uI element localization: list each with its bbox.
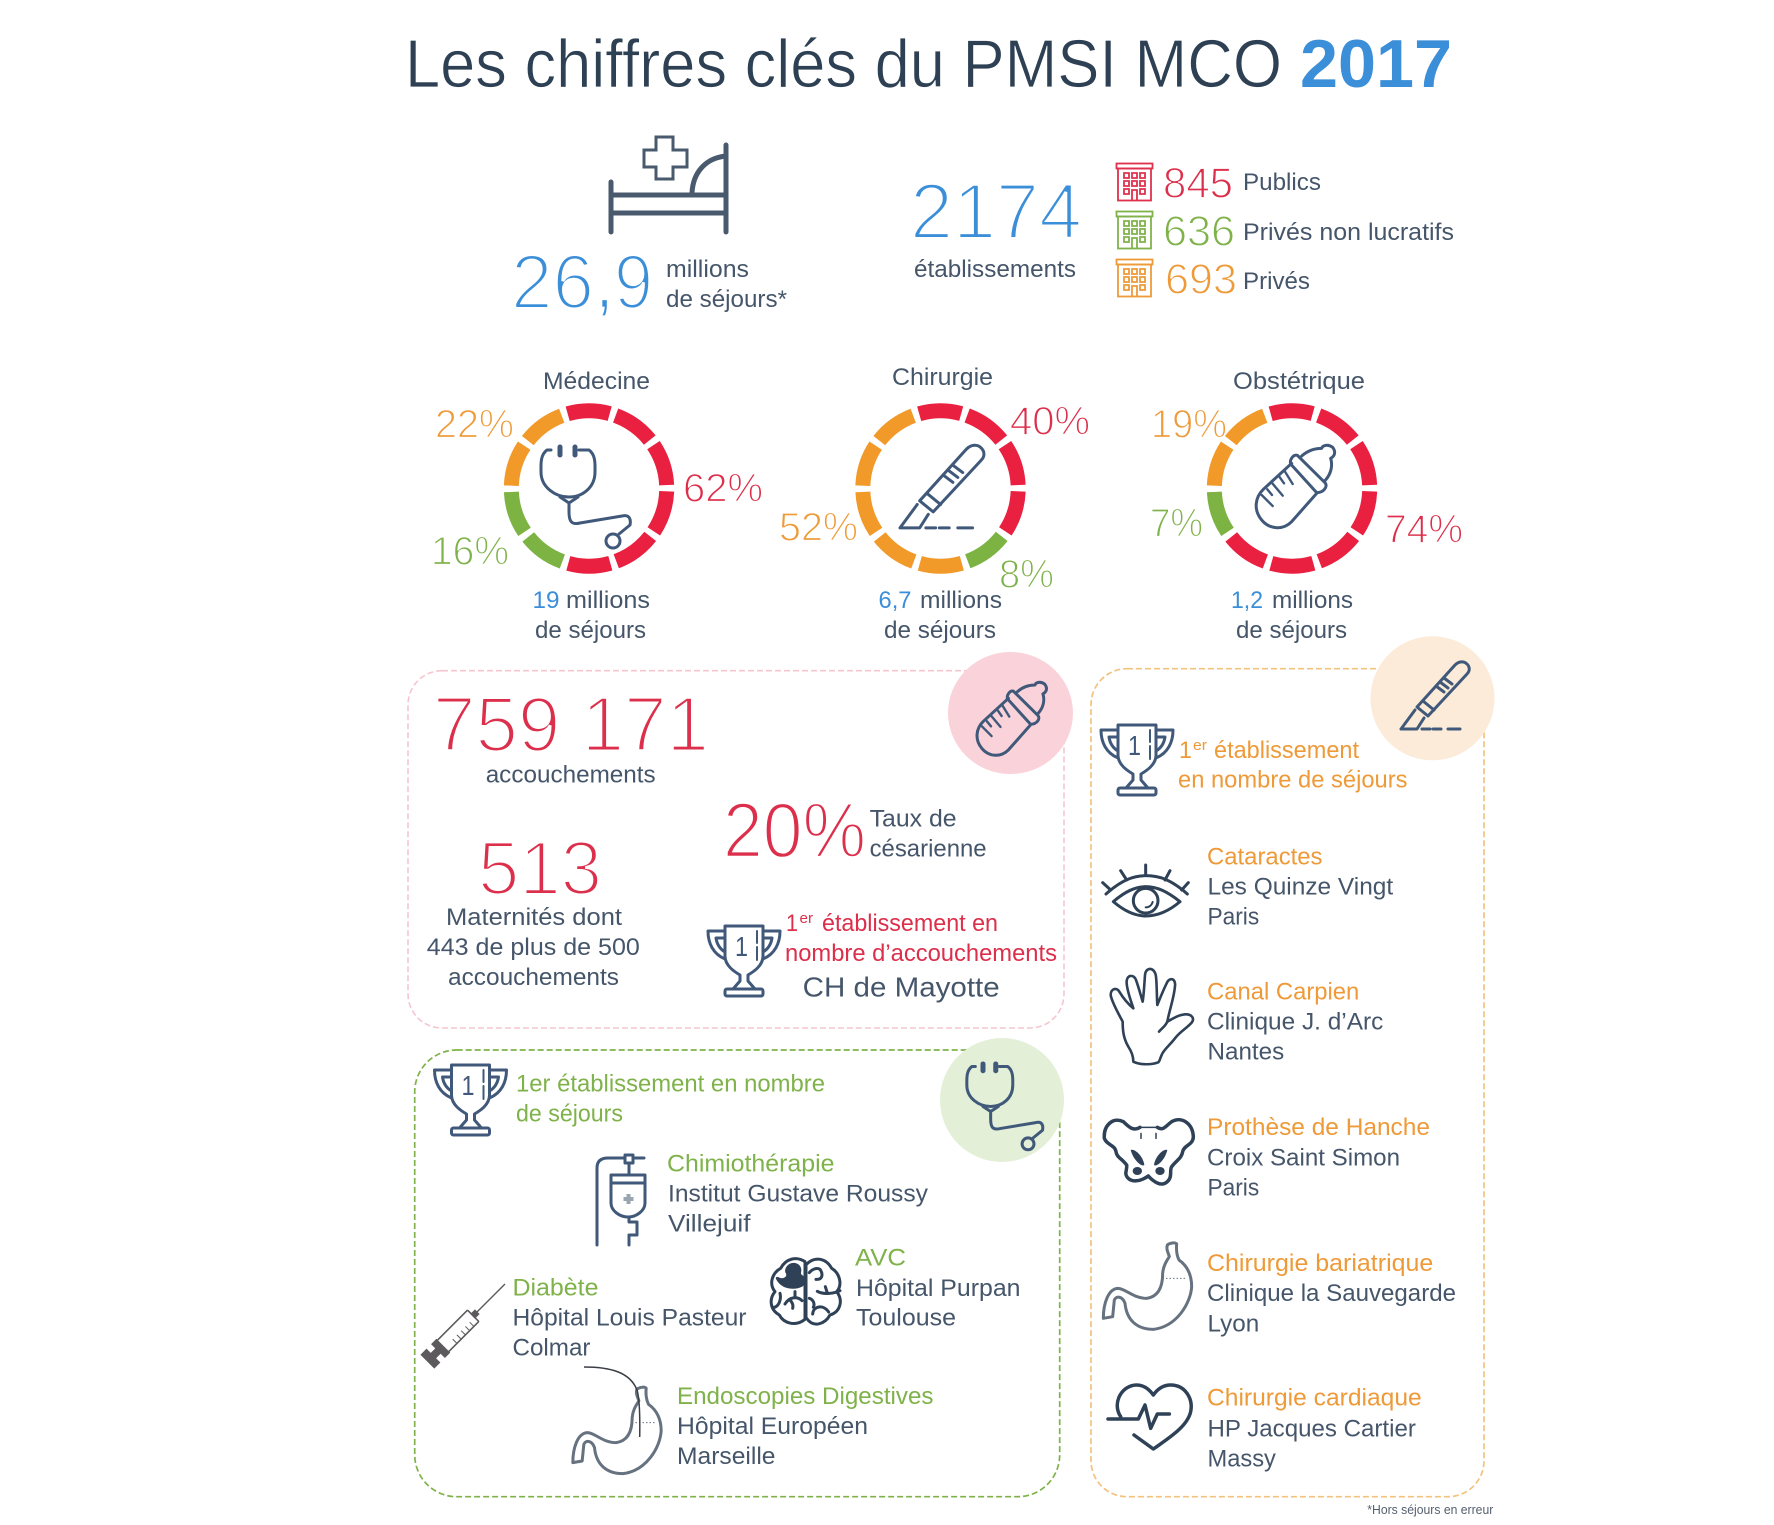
stat: 513 maternités <box>427 826 640 991</box>
icon: trophy <box>708 926 780 996</box>
label: 8%: 8% <box>999 553 1054 597</box>
icon: stomach with endoscope <box>573 1367 661 1474</box>
icon: trophy <box>434 1065 506 1135</box>
icon: syringe <box>422 1278 511 1367</box>
stat: privés non lucratifs: Privés non lucratifs <box>1243 219 1454 246</box>
stat: 26,9 millions de séjours: millions <box>666 256 749 283</box>
label: 19%: 19% <box>1151 403 1227 447</box>
entry: Chimiothérapie: Chimiothérapie <box>667 1151 834 1178</box>
text: 1,2 millions de séjours: 1,2 <box>1231 587 1263 614</box>
stat: publics: Publics <box>1243 169 1321 196</box>
entry: Cataractes: Cataractes <box>1207 843 1322 870</box>
icon: brain <box>771 1259 840 1324</box>
badge: stethoscope circle <box>940 1038 1064 1162</box>
icon: hospital bed <box>611 137 726 232</box>
stat: 26,9 millions de séjours: de séjours* <box>666 286 787 313</box>
entry: Chirurgie bariatrique: Chirurgie bariatrique <box>1207 1250 1433 1277</box>
panel: obstétrique <box>408 652 1073 1028</box>
text: 1,2 millions de séjours: de séjours <box>1236 617 1347 644</box>
stat: publics: 845 <box>1163 161 1233 208</box>
entry: Chirurgie cardiaque <box>1207 1385 1422 1473</box>
label: 22%: 22% <box>435 403 514 447</box>
entry: Endoscopies Digestives: Marseille <box>677 1443 776 1470</box>
entry: Canal Carpien: Nantes <box>1208 1038 1284 1065</box>
entry: Diabète <box>512 1275 746 1362</box>
text: 19 millions de séjours: de séjours <box>535 617 646 644</box>
stat: 513 maternités: 513 <box>478 826 602 912</box>
entry: Prothèse de Hanche: Prothèse de Hanche <box>1207 1114 1430 1141</box>
entry: Cataractes: Paris <box>1208 903 1259 930</box>
text: 6,7 millions de séjours: millions <box>920 587 1002 614</box>
title: 2017 <box>1300 26 1452 102</box>
text: 1er établissement en nombre de séjours: 1 <box>1179 737 1192 764</box>
title: Les chiffres clés du PMSI MCO <box>405 26 1282 102</box>
badge: scalpel circle <box>1370 636 1494 760</box>
stat: privés: 693 <box>1165 257 1237 304</box>
heading: Médecine: Médecine <box>543 368 650 395</box>
icon: green building <box>1116 212 1152 248</box>
text: 1er établissement, CH de Mayotte: 1 <box>786 910 798 937</box>
icon: eye <box>1103 865 1188 916</box>
stat: 513 maternités: accouchements <box>448 964 619 991</box>
icon: heart with pulse <box>1108 1385 1191 1449</box>
text: 1er établissement en nombre de séjours: en nombre de séjours <box>1178 767 1408 794</box>
stat: privés <box>1116 257 1310 304</box>
entry: Prothèse de Hanche <box>1207 1114 1430 1202</box>
icon: IV drip <box>597 1155 645 1245</box>
text: 1er établissement en nombre de séjours: de séjours <box>516 1101 623 1128</box>
entry: Canal Carpien <box>1207 978 1383 1065</box>
entry: Prothèse de Hanche: Paris <box>1208 1175 1259 1202</box>
stat: 513 maternités: 443 de plus de 500 <box>427 934 640 961</box>
stat: 26,9 millions de séjours <box>511 240 787 326</box>
label: 7%: 7% <box>1150 502 1203 546</box>
entry: Cataractes: Les Quinze Vingt <box>1208 873 1393 900</box>
text: 1er établissement en nombre de séjours: er <box>1193 737 1207 754</box>
stat: 20% taux de césarienne: Taux de <box>870 806 957 833</box>
text: 19 millions de séjours: 19 <box>532 587 560 614</box>
text: 1er établissement, CH de Mayotte <box>785 910 1057 1003</box>
entry: AVC: Hôpital Purpan <box>856 1275 1020 1302</box>
text: 19 millions de séjours <box>532 587 650 644</box>
entry: AVC: AVC <box>855 1245 906 1272</box>
entry: Diabète: Diabète <box>512 1275 598 1302</box>
section: Obstétrique <box>1150 368 1463 644</box>
icon: hand <box>1111 969 1193 1064</box>
entry: Chimiothérapie: Institut Gustave Roussy <box>668 1181 929 1208</box>
donut: Médecine <box>480 379 698 598</box>
heading: Obstétrique: Obstétrique <box>1233 368 1365 395</box>
entry: Chirurgie bariatrique <box>1207 1250 1456 1338</box>
text: 6,7 millions de séjours: de séjours <box>884 617 996 644</box>
icon: pelvis <box>1104 1120 1193 1184</box>
icon: trophy: 1 <box>735 931 748 962</box>
text: 19 millions de séjours: millions <box>566 587 650 614</box>
text: 1er établissement en nombre de séjours: établissement <box>1214 737 1359 764</box>
icon: trophy: 1 <box>1128 730 1141 761</box>
stat: 26,9 millions de séjours: 9 <box>614 240 653 326</box>
entry: Chirurgie bariatrique: Lyon <box>1208 1311 1259 1338</box>
entry: AVC: Toulouse <box>856 1305 956 1332</box>
entry: Prothèse de Hanche: Croix Saint Simon <box>1207 1145 1400 1172</box>
text: 6,7 millions de séjours <box>878 587 1002 644</box>
text: 1er établissement, CH de Mayotte: er <box>800 910 813 927</box>
stat: privés non lucratifs <box>1116 209 1454 256</box>
stat: 2174 établissements: 2174 <box>910 166 1082 256</box>
footnote: *Hors séjours en erreur <box>1367 1502 1494 1517</box>
icon: orange building <box>1116 260 1152 296</box>
text: 1,2 millions de séjours: millions <box>1272 587 1353 614</box>
entry: Chimiothérapie: Villejuif <box>668 1211 751 1238</box>
donut: Obstétrique <box>1183 379 1401 598</box>
entry: Endoscopies Digestives <box>677 1383 934 1470</box>
entry: Chirurgie cardiaque: Chirurgie cardiaque <box>1207 1385 1422 1412</box>
entry: Chirurgie cardiaque: Massy <box>1208 1446 1277 1473</box>
label: 16%: 16% <box>431 530 509 574</box>
text: 1er établissement, CH de Mayotte: nombre d’accouchements <box>785 940 1057 967</box>
panel: médecine <box>415 1038 1064 1497</box>
text: 1er établissement en nombre de séjours <box>516 1071 825 1128</box>
text: 1,2 millions de séjours <box>1231 587 1353 644</box>
icon: scalpel <box>900 445 984 528</box>
entry: Cataractes <box>1207 843 1393 930</box>
stat: 26,9 millions de séjours: , <box>597 246 612 322</box>
icon: red building <box>1116 164 1152 200</box>
stat: 20% taux de césarienne <box>723 786 987 874</box>
icon: stomach <box>1103 1243 1192 1329</box>
entry: Chirurgie cardiaque: HP Jacques Cartier <box>1208 1416 1416 1443</box>
badge: baby bottle circle <box>948 652 1073 774</box>
stat: publics <box>1116 161 1321 208</box>
entry: Diabète: Hôpital Louis Pasteur <box>512 1305 746 1332</box>
section: Chirurgie <box>779 364 1090 644</box>
text: 1er établissement, CH de Mayotte: établissement en <box>822 910 998 937</box>
stat: privés non lucratifs: 636 <box>1163 209 1235 256</box>
entry: AVC <box>855 1245 1020 1332</box>
stat: privés: Privés <box>1243 268 1310 295</box>
text: 1er établissement en nombre de séjours: 1er établissement en nombre <box>516 1071 825 1098</box>
text: 6,7 millions de séjours: 6,7 <box>878 587 912 614</box>
entry: Endoscopies Digestives: Endoscopies Digestives <box>677 1383 934 1410</box>
section: Médecine <box>431 368 763 644</box>
entry: Diabète: Colmar <box>512 1335 590 1362</box>
stat: 759 171 accouchements: accouchements <box>486 762 656 789</box>
icon: baby bottle <box>1256 445 1335 528</box>
stat: 20% taux de césarienne: césarienne <box>870 836 987 863</box>
text: 1er établissement en nombre de séjours <box>1178 737 1408 794</box>
donut: Chirurgie <box>831 379 1050 598</box>
icon: trophy: 1 <box>462 1070 474 1101</box>
stat: 2174 établissements: établissements <box>914 256 1076 283</box>
label: 40%: 40% <box>1010 400 1090 444</box>
entry: Endoscopies Digestives: Hôpital Européen <box>677 1413 868 1440</box>
entry: Canal Carpien: Clinique J. d’Arc <box>1207 1008 1383 1035</box>
icon: stethoscope <box>541 447 630 548</box>
stat: 20% taux de césarienne: 20% <box>723 786 866 874</box>
entry: Chirurgie bariatrique: Clinique la Sauvegarde <box>1207 1280 1456 1307</box>
entry: Chimiothérapie <box>667 1151 929 1238</box>
entry: Canal Carpien: Canal Carpien <box>1207 978 1359 1005</box>
heading: Chirurgie: Chirurgie <box>892 364 993 391</box>
text: 1er établissement, CH de Mayotte: CH de Mayotte <box>803 972 1000 1003</box>
label: 74%: 74% <box>1385 508 1463 552</box>
label: 62%: 62% <box>683 467 763 511</box>
label: 52%: 52% <box>779 506 858 550</box>
panel: chirurgie <box>1091 636 1494 1497</box>
icon: trophy <box>1101 725 1173 795</box>
stat: 26,9 millions de séjours: 26 <box>511 240 594 326</box>
stat: 759 171 accouchements: 759 171 <box>433 680 709 768</box>
stat: 513 maternités: Maternités dont <box>446 904 622 931</box>
